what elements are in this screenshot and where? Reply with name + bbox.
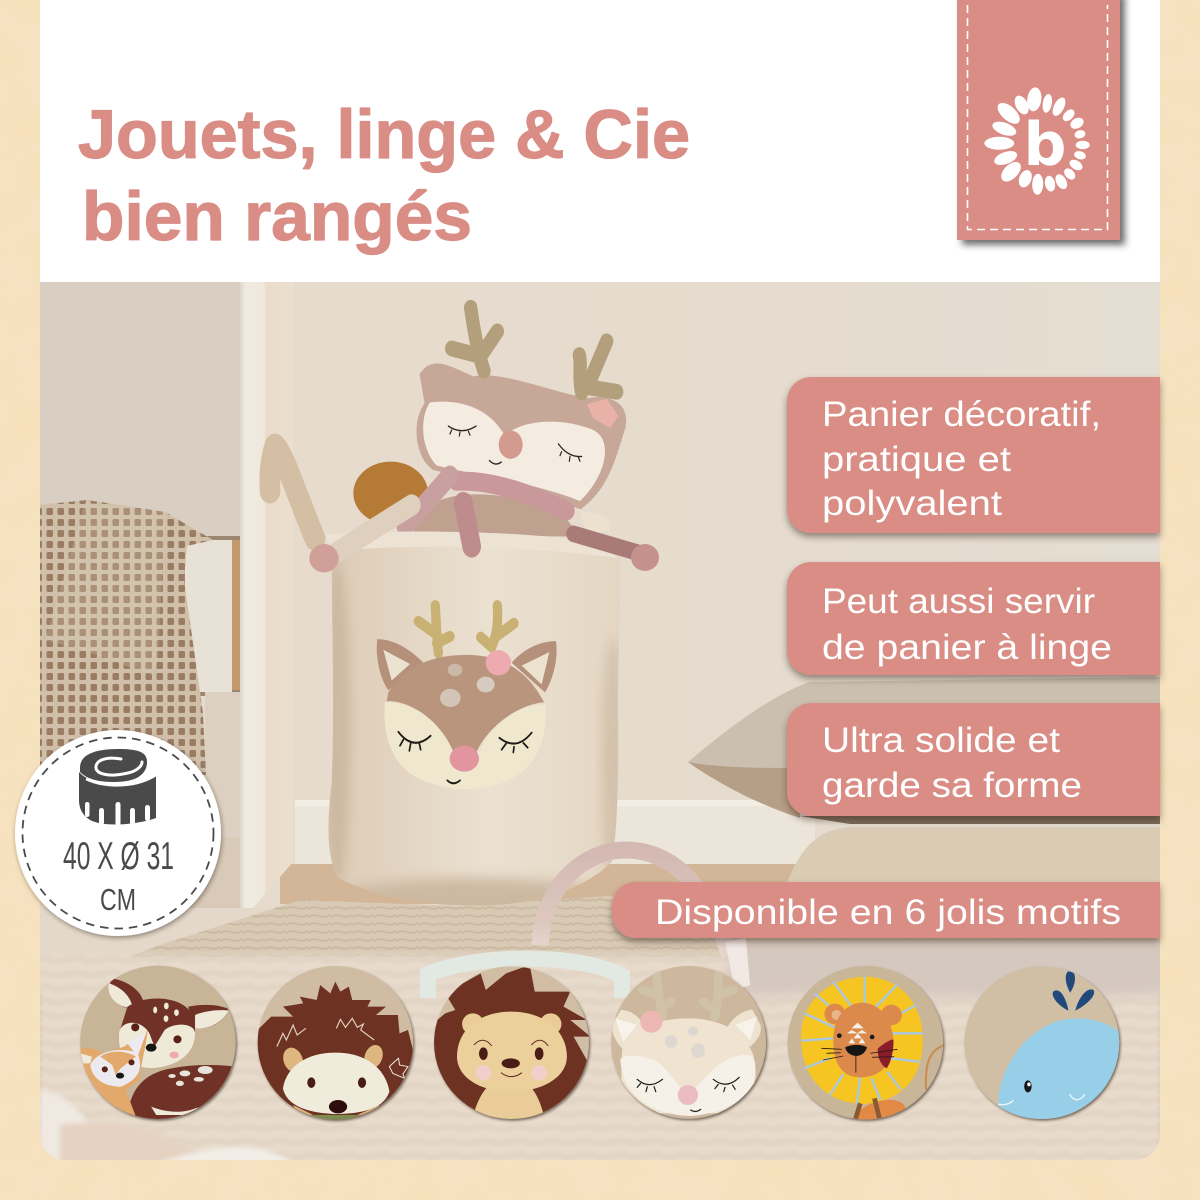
applique antlers	[418, 606, 514, 653]
white wooden arch	[428, 938, 750, 998]
basket deer applique	[377, 606, 557, 789]
header panel	[40, 0, 1160, 282]
icon: measuring tape	[79, 749, 156, 828]
feature pill: decorative: polyvalent	[822, 483, 1002, 523]
floor area left	[40, 908, 290, 960]
feature pill: sturdy	[787, 703, 1160, 816]
motif: lion	[783, 963, 948, 1123]
applique head	[387, 655, 544, 752]
cabinet	[40, 282, 250, 908]
door frame	[240, 282, 293, 908]
pink wooden arch	[532, 842, 734, 957]
plush back	[353, 462, 428, 525]
feature pill: sturdy: garde sa forme	[822, 765, 1082, 805]
size badge: 40 X Ø 31	[63, 835, 174, 878]
plush limbs	[337, 505, 637, 552]
feature pill: laundry basket: Peut aussi servir	[822, 581, 1095, 621]
motif: whale	[962, 963, 1124, 1123]
wood floor	[280, 864, 820, 904]
plush antlers	[452, 308, 617, 393]
feature pill: laundry basket: de panier à linge	[822, 627, 1112, 667]
waffle blanket	[40, 500, 213, 775]
size badge: CM	[100, 882, 136, 917]
rug	[40, 882, 1160, 1160]
motif: deer family	[77, 963, 239, 1123]
feature pill: decorative: Panier décoratif,	[822, 394, 1101, 434]
basket handles	[260, 434, 326, 550]
plush head	[418, 366, 624, 507]
feature pill: decorative	[787, 377, 1160, 533]
icon: sunflower logo: b	[1024, 110, 1066, 180]
title: Jouets, linge & Cie	[78, 96, 690, 173]
feature pill: sturdy: Ultra solide et	[822, 720, 1060, 760]
feature pill: laundry basket	[787, 562, 1160, 675]
feature pill: decorative: pratique et	[822, 439, 1011, 479]
title: bien rangés	[82, 178, 472, 255]
motif: pastel deer	[607, 963, 772, 1123]
lower pillow	[786, 827, 1160, 885]
motif thumbnails left group	[77, 963, 594, 1123]
upper pillow	[688, 677, 1160, 824]
motif: hedgehog close-up	[432, 963, 594, 1123]
baseboard	[295, 806, 815, 864]
product photo	[40, 282, 1170, 1165]
basket fabric folds	[320, 558, 627, 933]
plush scarf	[405, 475, 567, 527]
icon: sunflower logo	[984, 87, 1090, 195]
size badge	[15, 730, 221, 936]
motifs banner: Disponible en 6 jolis motifs	[655, 892, 1121, 932]
blurred textiles lower left	[40, 1090, 295, 1165]
motif thumbnails right group	[607, 963, 1124, 1123]
storage basket with plush toy	[270, 308, 659, 933]
bottom blurred rug area	[40, 955, 1160, 1165]
motif: hedgehog front	[253, 963, 418, 1123]
brand label tag	[957, 0, 1120, 240]
basket body	[328, 536, 620, 906]
title	[78, 96, 690, 255]
applique ears	[377, 639, 423, 690]
applique cheeks	[384, 702, 546, 789]
motifs banner	[612, 882, 1160, 938]
